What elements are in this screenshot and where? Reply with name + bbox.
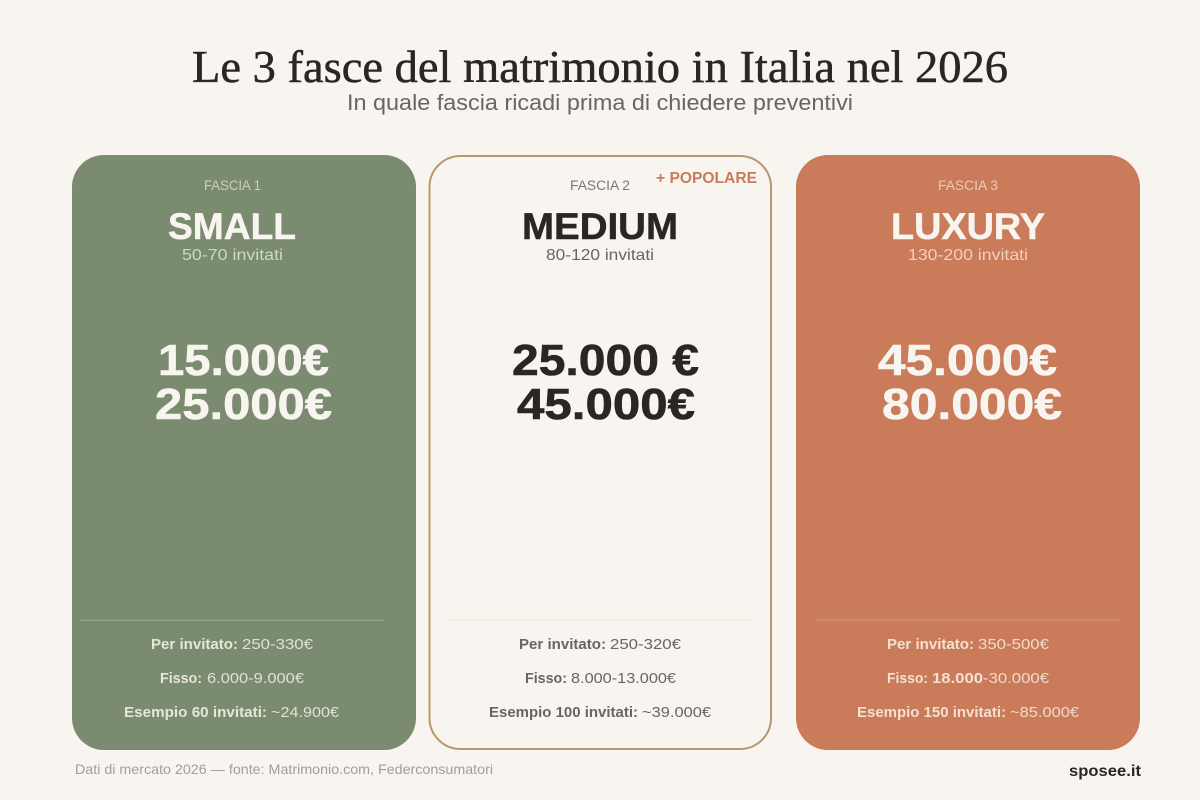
price range: medium: 45.000€ [517,380,695,429]
details: small: ~24.900€ [271,704,340,721]
price range: luxury [878,336,1062,429]
title: Le 3 fasce del matrimonio in Italia nel 2026 [192,41,1008,92]
heading: luxury: LUXURY [891,206,1045,247]
heading: medium: MEDIUM [522,206,678,247]
price range: small: 15.000€ [158,336,329,385]
price range: luxury: 80.000€ [882,380,1062,429]
panel: luxury [796,155,1140,750]
details: medium [489,636,712,721]
details: small: Fisso: [160,670,202,687]
heading: small: SMALL [168,206,296,247]
details: luxury: Per invitato: [887,636,974,653]
badge: popolare: + POPOLARE [656,170,757,187]
details: medium: 8.000-13.000€ [571,670,677,687]
details: small: Per invitato: [151,636,238,653]
label: fascia 2: FASCIA 2 [570,178,630,193]
card background: small [72,155,416,750]
subtitle: In quale fascia ricadi prima di chiedere preventivi [347,90,853,115]
details: small: Esempio 60 invitati: [124,704,267,721]
details: luxury [857,636,1080,721]
footer brand: sposee.it [1069,763,1142,780]
details: medium: Esempio 100 invitati: [489,704,638,721]
details: medium: Fisso: [525,670,567,687]
guests: medium: 80-120 invitati [546,247,654,264]
details: small: 250-330€ [242,636,314,653]
card background: luxury [796,155,1140,750]
details: luxury: Fisso: [887,670,928,687]
details: medium: Per invitato: [519,636,606,653]
details: luxury: Esempio 150 invitati: [857,704,1006,721]
details: luxury: -30.000€ [983,670,1050,687]
guests: small: 50-70 invitati [182,247,283,264]
price range: medium [512,336,699,429]
panel: medium [430,156,771,749]
price range: luxury: 45.000€ [878,336,1057,385]
details: luxury: ~85.000€ [1010,704,1080,721]
label: fascia 3: FASCIA 3 [938,178,998,193]
label: fascia 1: FASCIA 1 [204,178,261,193]
details: luxury: 18.000 [932,670,983,687]
price range: medium: 25.000 € [512,336,699,385]
price range: small [155,336,332,429]
details: luxury: 350-500€ [978,636,1050,653]
details: medium: ~39.000€ [642,704,712,721]
details: small [124,636,340,721]
details: small: 6.000-9.000€ [207,670,305,687]
price range: small: 25.000€ [155,380,332,429]
footer source: Dati di mercato 2026 — fonte: Matrimonio.com, Federconsumatori [75,761,493,777]
panel: small [72,155,416,750]
details: medium: 250-320€ [610,636,682,653]
card background: medium [430,156,771,749]
guests: luxury: 130-200 invitati [908,247,1028,264]
